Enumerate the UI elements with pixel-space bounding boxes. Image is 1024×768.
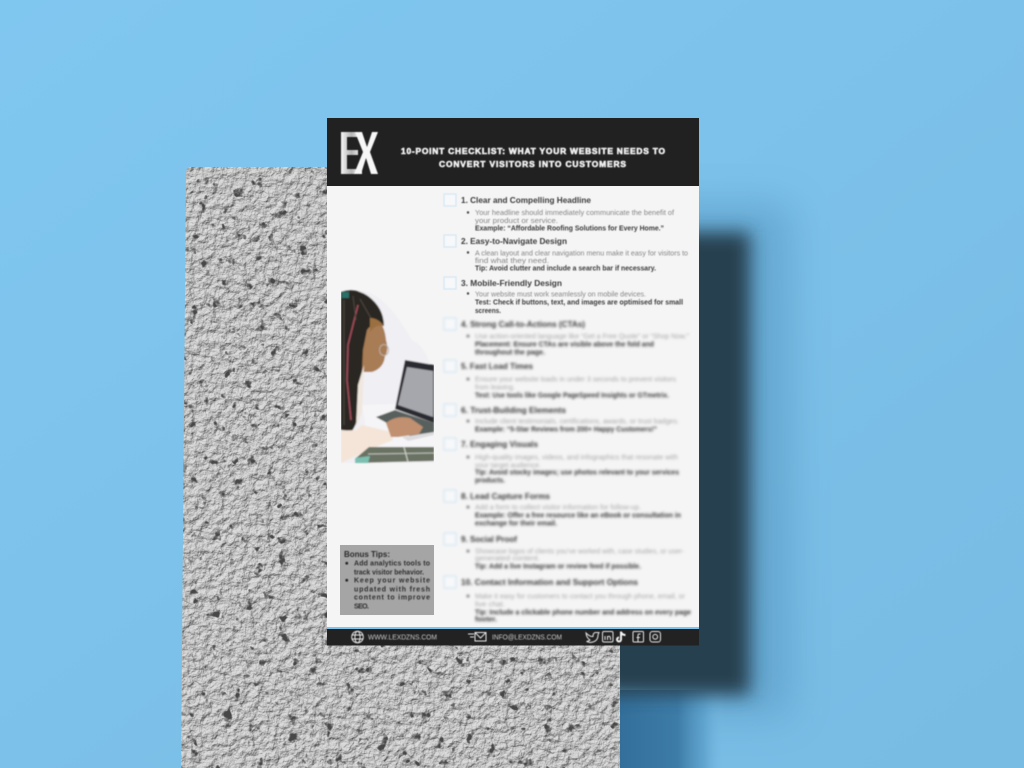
website address: WWW.LEXDZNS.COM [368,634,437,642]
item 3: Test: Check if buttons, text, and images are optimised for small [475,300,683,306]
item 5: Ensure your website loads in under 3 seconds to prevent visitors [475,376,676,384]
item 7 [444,438,679,484]
item 10: 10. Contact Information and Support Options [461,577,638,587]
item 8: exchange for their email. [475,520,557,528]
item 10 [444,576,691,624]
table [362,402,434,452]
hair [341,290,384,431]
item 1: 1. Clear and Compelling Headline [461,195,591,205]
title [401,146,665,169]
item 2: find what they need. [475,258,549,265]
icon: envelope [468,632,486,641]
item 1: Example: “Affordable Roofing Solutions for Every Home.” [475,226,664,232]
item 6: 6. Trust-Building Elements [461,405,566,415]
sharp checklist items 1-3 [444,194,688,315]
item 7: your target audience. [475,462,541,470]
item 3: screens. [475,308,501,315]
papers on table [355,447,434,463]
item 7: products. [475,478,505,484]
blurred checklist items 4-10 [444,318,691,624]
logo EX [341,132,378,174]
item 2: Tip: Avoid clutter and include a search bar if necessary. [475,266,656,272]
item 2 [444,235,688,272]
checklist page [327,118,699,646]
item 1: your product or service. [475,218,558,225]
drop shadows [600,205,790,768]
laptop keyboard [376,410,434,436]
hand [386,417,423,437]
infographic scene [181,118,812,768]
title: CONVERT VISITORS INTO CUSTOMERS [439,159,626,169]
item 4: throughout the page. [475,350,545,356]
bonus bullets: Add analytics tools to [354,560,430,568]
item 7: 7. Engaging Visuals [461,439,538,449]
icon: facebook [633,632,644,642]
item 5: from leaving. [475,384,515,392]
item 10: live chat. [475,602,505,608]
laptop screen [395,360,434,423]
item 8: 8. Lead Capture Forms [461,491,550,501]
email address: INFO@LEXDZNS.COM [492,634,562,642]
header band [327,118,699,186]
item 9: 9. Social Proof [461,534,517,544]
item 7: Tip: Avoid stocky images; use photos relevant to your services [475,470,679,476]
item 4: 4. Strong Call-to-Actions (CTAs) [461,319,585,329]
concrete block [170,160,630,768]
item 3: 3. Mobile-Friendly Design [461,278,562,288]
item 3: Your website must work seamlessly on mobile devices. [475,292,646,298]
item 8: Example: Offer a free resource like an eBook or consultation in [475,512,681,520]
item 5: 5. Fast Load Times [461,361,533,371]
bonus bullets: Keep your website [354,578,430,584]
icon: globe [352,631,363,643]
item 10: footer. [475,616,497,624]
title: 10-POINT CHECKLIST: WHAT YOUR WEBSITE NEEDS TO [401,146,665,156]
bonus heading: Bonus Tips: [344,549,390,559]
item 2: 2. Easy-to-Navigate Design [461,236,567,246]
item 1 [444,194,674,232]
bonus bullets: SEO. [354,604,369,610]
item 4 [444,318,690,356]
icon: twitter [586,632,599,642]
footer bar [327,627,699,646]
item 4: Placement: Ensure CTAs are visible above the fold and [475,342,654,348]
item 9: Showcase logos of clients you’ve worked with, case studies, or user- [475,548,685,556]
bonus tips box [340,545,434,615]
photo: woman at laptop [341,290,434,463]
item 1: Your headline should immediately communicate the benefit of [475,210,674,217]
item 5 [444,360,676,400]
item 2: A clean layout and clear navigation menu make it easy for visitors to [475,250,688,258]
item 9: generated content. [475,556,540,562]
bonus bullets: content to improve [354,594,430,602]
page sheet [327,118,699,628]
bonus bullets: updated with fresh [354,586,430,594]
item 9: Tip: Add a live Instagram or review feed if possible. [475,564,641,570]
item 10: Make it easy for customers to contact you through phone, email, or [475,594,686,600]
item 8 [444,490,681,528]
face [362,315,387,372]
sweater [341,425,393,463]
item 5: Test: Use tools like Google PageSpeed Insights or GTmetrix. [475,392,669,400]
item 6: Include client testimonials, certifications, awards, or trust badges. [475,418,679,426]
item 8: Add a form to collect visitor information for follow-up. [475,504,641,512]
icon: tiktok [617,632,626,642]
icon: linkedin [602,632,613,642]
item 9 [444,533,685,570]
bonus bullets [346,560,430,610]
item 6 [444,404,679,434]
item 7: High-quality images, videos, and infographics that resonate with [475,454,678,462]
item 10: Tip: Include a clickable phone number and address on every page [475,610,691,616]
item 4: Use action-oriented language like “Get a Free Quote” or “Shop Now.” [475,334,690,340]
item 3 [444,277,683,315]
glasses [380,344,388,356]
bonus bullets: track visitor behavior. [354,570,424,576]
item 6: Example: “5-Star Reviews from 200+ Happy Customers!” [475,426,657,434]
icon: instagram [650,632,660,642]
